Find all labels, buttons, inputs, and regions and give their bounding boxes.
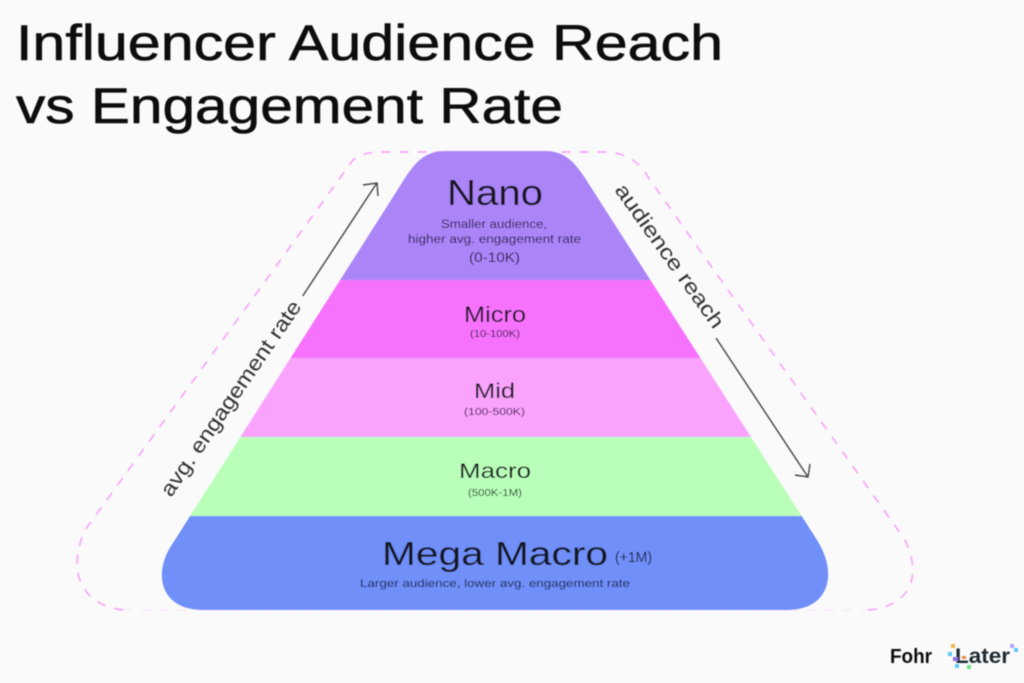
logo: Later: Later [955,645,1010,668]
pyramid [161,150,829,611]
nano label: Nano [447,172,543,213]
nano label: Smaller audience, [441,219,547,231]
axis label: audience reach: audience reach [610,180,729,333]
mega macro label: Mega Macro [382,535,608,572]
axis label: avg. engagement rate: avg. engagement rate [156,296,306,501]
logo: Fohr: Fohr [890,646,932,668]
title: Influencer Audience Reach [16,15,723,71]
micro label: Micro [464,302,526,327]
nano label [408,172,581,265]
macro label [459,460,531,499]
macro label: (500K-1M) [468,488,522,499]
micro label [464,302,526,340]
title [16,15,723,134]
micro label: (10-100K) [470,329,520,340]
tier: mega macro [161,515,829,611]
logo: Later [948,644,1018,669]
title: vs Engagement Rate [16,78,563,134]
mega macro label: (+1M) [615,549,652,566]
tier: macro [190,436,802,516]
tier: nano [340,150,651,281]
tier: mid [240,358,751,438]
mid label: Mid [474,380,515,403]
arrow: audience reach down [716,338,810,477]
arrow: engagement rate up [303,183,378,296]
nano label: higher avg. engagement rate [408,234,581,246]
tier: micro [290,279,701,359]
nano label: (0-10K) [469,249,520,265]
mega macro label: Larger audience, lower avg. engagement rate [360,578,630,590]
macro label: Macro [459,460,531,483]
mid label: (100-500K) [464,407,525,418]
mid label [464,380,525,418]
dashed outline [77,152,913,610]
mega macro label [360,535,652,590]
